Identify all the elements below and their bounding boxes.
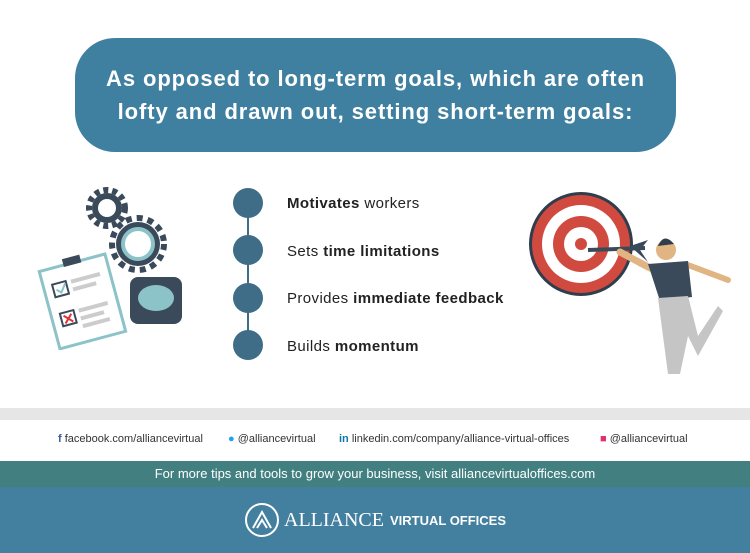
text: Motivates workers: [287, 195, 420, 212]
text: ● @alliancevirtual: [228, 433, 316, 445]
text: f facebook.com/alliancevirtual: [58, 433, 203, 445]
text: Sets time limitations: [287, 243, 440, 260]
text: Provides immediate feedback: [287, 290, 504, 307]
teal band: [0, 461, 750, 487]
header pill: lofty and drawn out, setting short-term goals:: [118, 99, 633, 124]
logo: ALLIANCE: [284, 508, 384, 530]
timeline: [247, 218, 249, 330]
text: in linkedin.com/company/alliance-virtual-offices: [339, 433, 569, 445]
icon: target and dart thrower: [529, 192, 731, 374]
item 1: [233, 188, 420, 218]
icon: clipboard, gears and chat: [38, 187, 182, 350]
item 3: [233, 283, 504, 313]
logo: [245, 503, 506, 537]
social row: [58, 433, 688, 445]
text: ■ @alliancevirtual: [600, 433, 688, 445]
footer logo band: [0, 487, 750, 553]
header pill: [75, 38, 676, 152]
item 4: [233, 330, 419, 360]
teal band: For more tips and tools to grow your business, visit alliancevirtualoffices.com: [155, 466, 595, 481]
logo: VIRTUAL OFFICES: [390, 512, 506, 528]
text: Builds momentum: [287, 338, 419, 355]
header pill: As opposed to long-term goals, which are often: [106, 66, 645, 91]
item 2: [233, 235, 440, 265]
grey band: [0, 408, 750, 420]
